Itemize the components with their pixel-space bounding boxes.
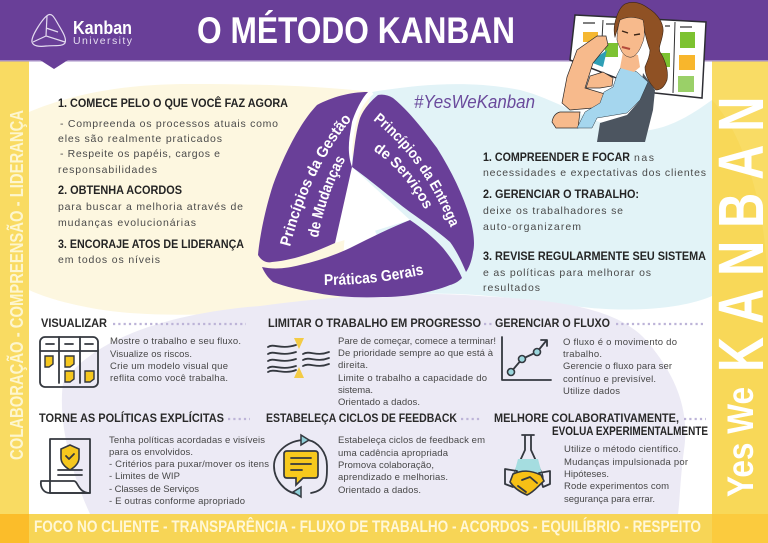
header bar (0, 0, 768, 69)
segment: general practices: Práticas Gerais (324, 264, 424, 285)
segment: change management: de Mudanças (308, 156, 344, 237)
icon: limited flow waves (268, 338, 329, 378)
text block: service delivery principles: 3. REVISE REGULARMENTE SEU SISTEMA (483, 251, 706, 263)
practice: estabeleça ciclos de feedback: Orientado a dados. (338, 485, 421, 496)
text block: service delivery principles (483, 152, 706, 294)
practice: limitar o trabalho em progresso: direita. (338, 360, 368, 371)
left side band (0, 60, 29, 514)
text block: change management principles: 2. OBTENHA ACORDOS (58, 185, 182, 197)
title: O MÉTODO KANBAN (197, 10, 515, 51)
text block: change management principles (58, 97, 288, 266)
practice: limitar o trabalho em progresso: De prioridade sempre ao que está à (338, 348, 494, 359)
practice: gerenciar o fluxo (495, 316, 703, 397)
text block: change management principles: 3. ENCORAJE ATOS DE LIDERANÇA (58, 239, 244, 251)
practice: limitar o trabalho em progresso: LIMITAR O TRABALHO EM PROGRESSO (268, 316, 481, 330)
text block: change management principles: mudanças evolucionárias (58, 217, 196, 229)
text block: change management principles: - Compreenda os processos atuais como (60, 118, 278, 130)
face (617, 17, 644, 57)
icon: flow chart (502, 337, 551, 380)
practice: gerenciar o fluxo: contínuo e previsível. (563, 374, 656, 385)
text block: service delivery principles: nas (634, 152, 654, 164)
practice: torne as políticas explícitas: - Limites de WIP (109, 471, 180, 482)
segment: general practices (262, 220, 462, 298)
background blob: lavender (62, 294, 685, 514)
practice: melhore colaborativamente: EVOLUA EXPERIMENTALMENTE (552, 426, 708, 438)
practice: estabeleça ciclos de feedback: ESTABELEÇA CICLOS DE FEEDBACK (266, 411, 457, 425)
segment: service delivery: de Serviços (374, 144, 431, 208)
neck (620, 52, 640, 72)
practice: melhore colaborativamente: MELHORE COLABORATIVAMENTE, (494, 411, 679, 425)
practice: visualizar: VISUALIZAR (41, 316, 107, 330)
logo: Kanban University: University (73, 35, 133, 47)
text block: change management principles: responsabilidades (58, 164, 157, 176)
practice: torne as políticas explícitas: TORNE AS POLÍTICAS EXPLÍCITAS (39, 410, 224, 425)
text block: service delivery principles: resultados (483, 282, 540, 294)
icon: feedback cycle (274, 435, 327, 497)
text block: service delivery principles: e as políticas para melhorar os (483, 267, 651, 279)
practice: torne as políticas explícitas: - Classes de Serviços (109, 484, 199, 495)
icon: policy document (41, 439, 90, 493)
practice: estabeleça ciclos de feedback: Estabeleça ciclos de feedback em (338, 435, 485, 446)
hand on arm (586, 72, 613, 88)
practice: visualizar: Visualize os riscos. (110, 349, 192, 360)
practice: torne as políticas explícitas: - Critérios para puxar/mover os itens (109, 459, 269, 470)
segment: change management: Princípios da Gestão (280, 116, 350, 246)
right side band (712, 60, 768, 514)
practice: limitar o trabalho em progresso: Limite o trabalho a capacidade do (338, 373, 487, 384)
practice: limitar o trabalho em progresso: Pare de começar, comece a terminar! (338, 336, 496, 347)
text block: change management principles: 1. COMECE PELO O QUE VOCÊ FAZ AGORA (58, 97, 288, 110)
text block: change management principles: - Respeite os papéis, cargos e (60, 148, 220, 160)
icon: flask and handshake (505, 435, 550, 495)
hair (614, 2, 667, 90)
practice: visualizar: Mostre o trabalho e seu fluxo. (110, 336, 241, 347)
practice: melhore colaborativamente (494, 411, 708, 505)
segment: service delivery (352, 94, 474, 272)
icon: kanban board (40, 337, 98, 387)
practice: torne as políticas explícitas: - E outras conforme apropriado (109, 496, 245, 507)
logo: Kanban University (32, 14, 133, 47)
logo: Kanban University: Kanban (73, 18, 132, 38)
practice: melhore colaborativamente: Hipóteses. (564, 469, 609, 480)
practice: visualizar: reflita como você trabalha. (110, 373, 228, 384)
lower arm (552, 112, 580, 128)
practice: gerenciar o fluxo: Gerencie o fluxo para ser (563, 361, 672, 372)
segment: change management (258, 92, 368, 262)
text block: service delivery principles: auto-organizarem (483, 221, 581, 233)
practice: visualizar (40, 316, 246, 387)
shirt (577, 65, 648, 128)
text block: service delivery principles: deixe os trabalhadores se (483, 205, 623, 217)
text block: change management principles: eles são realmente praticados (58, 133, 222, 145)
practice: torne as políticas explícitas: para os envolvidos. (109, 447, 193, 458)
raised arm (562, 36, 608, 110)
practice: melhore colaborativamente: Mudanças impulsionada por (564, 457, 688, 468)
practice: gerenciar o fluxo: Utilize dados (563, 386, 620, 397)
practice: limitar o trabalho em progresso: sistema. (338, 385, 373, 396)
segment: service delivery: Princípios da Entrega (374, 112, 457, 228)
practice: melhore colaborativamente: segurança para errar. (564, 494, 655, 505)
text block: service delivery principles: 1. COMPREENDER E FOCAR (483, 152, 631, 164)
left band text: COLABORAÇÃO - COMPREENSÃO - LIDERANÇA (6, 110, 27, 460)
illustration: woman flexing in front of kanban board (552, 2, 706, 142)
hashtag: #YesWeKanban (414, 92, 535, 112)
practice: torne as políticas explícitas (39, 410, 269, 507)
vest (597, 73, 655, 142)
practice: estabeleça ciclos de feedback: aprendizado e melhorias. (338, 472, 448, 483)
practice: melhore colaborativamente: Rode experimentos com (564, 481, 669, 492)
practice: gerenciar o fluxo: GERENCIAR O FLUXO (495, 316, 610, 330)
text block: change management principles: em todos os níveis (58, 254, 160, 266)
text block: service delivery principles: necessidades e expectativas dos clientes (483, 167, 706, 179)
practice: melhore colaborativamente: Utilize o método científico. (564, 444, 681, 455)
practice: estabeleça ciclos de feedback: Promova colaboração, (338, 460, 434, 471)
text block: service delivery principles: 2. GERENCIAR O TRABALHO: (483, 189, 639, 201)
practice: torne as políticas explícitas: Tenha políticas acordadas e visíveis (109, 435, 265, 446)
practice: gerenciar o fluxo: trabalho. (563, 349, 602, 360)
background blob: light blue (350, 84, 712, 310)
background blob: cream (29, 84, 372, 315)
triangle diagram (258, 92, 474, 298)
text block: change management principles: para buscar a melhoria através de (58, 201, 243, 213)
practice: limitar o trabalho em progresso: Orientado a dados. (338, 397, 420, 408)
right band text: Yes We: Yes We (720, 387, 761, 497)
practice: visualizar: Crie um modelo visual que (110, 361, 228, 372)
practice: estabeleça ciclos de feedback: uma cadência apropriada (338, 448, 449, 459)
practice: estabeleça ciclos de feedback (266, 411, 485, 497)
practice: gerenciar o fluxo: O fluxo é o movimento do (563, 337, 677, 348)
practice: limitar o trabalho em progresso (268, 316, 496, 408)
bottom band (0, 514, 768, 543)
